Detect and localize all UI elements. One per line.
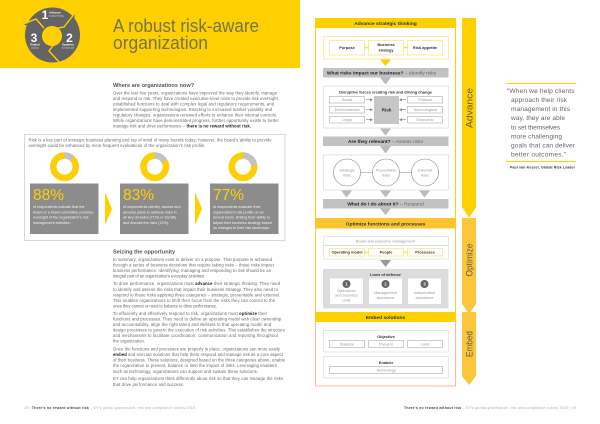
panel: risk categories: Preventable xyxy=(376,168,396,172)
text block: seizing the opportunity: through a series of business decisions that require taking risks – these risks impact xyxy=(113,263,275,268)
title xyxy=(113,15,259,53)
stat card: 88% xyxy=(30,184,98,234)
panel: disruptive forces: Risk xyxy=(382,108,392,112)
panel: optimize functions and processes xyxy=(315,218,456,312)
arrows: three grey down xyxy=(341,190,430,198)
text block: where are organizations now: established functions to deal with complex legal and regulatory requirements, and xyxy=(113,102,275,106)
panel: disruptive forces xyxy=(324,86,448,128)
panel: board and executive management: Operating model xyxy=(332,250,362,255)
card: third line xyxy=(408,278,441,304)
panel: board oversight statistics xyxy=(24,134,285,240)
strategy boxes: strategy xyxy=(378,48,394,52)
pull quote: goals that can deliver xyxy=(511,142,576,150)
panel: embed solutions xyxy=(315,312,456,386)
stat card: 77%: organization's risk profile on an xyxy=(213,210,264,214)
stat card: 88%: oversight of the organization's risk xyxy=(33,216,89,220)
stat card: 88%: of respondents indicate that the xyxy=(33,205,84,209)
icon: advance optimize embed cycle xyxy=(23,8,80,63)
heading: optimize functions and processes: Optimize functions and processes xyxy=(346,221,426,227)
panel: board and executive management: Processes xyxy=(415,250,435,255)
panel: disruptive forces: Political xyxy=(418,97,432,102)
panel: risk categories xyxy=(324,155,448,190)
stat card: 83%: 83% xyxy=(123,187,154,204)
stat card: 83%: and discuss the risks (12%). xyxy=(123,221,169,225)
stat card: 88%: 88% xyxy=(33,187,64,204)
panel: risk categories: risks xyxy=(421,172,429,178)
arrow: grey down xyxy=(380,128,391,136)
side arrow: embed xyxy=(462,312,476,385)
stat card: 83% xyxy=(120,184,188,234)
panel: disruptive forces: Technological xyxy=(413,107,437,112)
panel: objective xyxy=(324,330,448,352)
stat card: 83%: of respondents identify, assess and xyxy=(123,205,181,209)
bar: assess risks xyxy=(323,136,448,146)
panel: lines of defense: Lines of defense xyxy=(370,272,402,277)
bar: assess risks: Are they relevant? – Assess risks xyxy=(348,139,424,145)
text block: seizing the opportunity: of their business. These solutions, designed based on the three categories above, enable xyxy=(113,358,286,362)
pull quote: Paul van Kessel, Global Risk Leader xyxy=(510,166,576,170)
text block: seizing the opportunity: respond to those risks applying three categories – strategic, preventable and external. xyxy=(113,292,280,298)
arrow: grey down xyxy=(380,260,391,267)
panel: advance strategic thinking xyxy=(315,18,456,218)
bar: respond: What do I do about it? – Respond xyxy=(347,202,424,208)
text block: seizing the opportunity: design processes to govern the execution of risk activities. This establishes the structure xyxy=(113,328,286,333)
panel: board and executive management: Board and executive management xyxy=(356,238,416,244)
text block: seizing the opportunity: business performance. Identifying, managing and responding to risk should be an xyxy=(113,268,272,273)
icon: advance optimize embed cycle: Embed xyxy=(30,42,40,46)
panel: objective: Prevent xyxy=(379,342,394,346)
footer: left page: 18 | There's no reward without risk – EY's global governance, risk and compliance survey 2015 xyxy=(24,406,195,410)
heading: embed solutions: Embed solutions xyxy=(366,315,405,321)
text block: seizing the opportunity: that drive performance and success. xyxy=(113,382,184,387)
side arrow: advance: Advance xyxy=(464,88,476,128)
text block: seizing the opportunity: embed and execute solutions that help them respond and manage risk as a core aspect xyxy=(113,352,284,357)
pull quote: more challenging xyxy=(511,133,562,140)
arrow: grey down xyxy=(380,208,391,215)
bar: identify risks: What risks impact our business? – Identify risks xyxy=(327,71,437,77)
arrow: grey down xyxy=(380,78,391,84)
pull quote: “When we help clients xyxy=(507,88,575,95)
footer: right page: There's no reward without risk – EY's global governance, risk and compliance survey 2015 | 19 xyxy=(404,406,576,410)
panel: risk categories: risks xyxy=(382,172,390,178)
arrow: grey down xyxy=(380,146,391,154)
panel: enabler: Technology xyxy=(376,368,396,372)
text block: seizing the opportunity: To efficiently and effectively respond to risk, organizations must optimize their xyxy=(113,311,268,316)
title: A robust risk-aware xyxy=(113,15,259,36)
stat card: 77%: on changes to their risk landscape. xyxy=(213,226,270,230)
text block: where are organizations now: regulatory changes, organizations renewed efforts to enhance their internal controls. xyxy=(113,112,277,118)
side arrow: advance xyxy=(462,18,476,218)
pull quote: better outcomes.” xyxy=(511,152,566,158)
bar: respond xyxy=(323,199,448,208)
icon: advance optimize embed cycle: strategic thinking xyxy=(48,14,64,18)
heading: seizing the opportunity: Seizing the opportunity xyxy=(113,250,176,256)
heading: advance strategic thinking xyxy=(315,18,456,28)
panel: disruptive forces: Environmental xyxy=(335,107,360,112)
panel: disruptive forces: Economic xyxy=(416,117,434,122)
stat card: 77%: 77% xyxy=(213,187,244,204)
text block: seizing the opportunity: and mechanisms to facilitate coordination, communication and reporting throughout xyxy=(113,333,279,338)
card: first line xyxy=(330,278,363,304)
stat card: 88%: management activities. xyxy=(33,221,71,225)
panel: enabler xyxy=(324,356,448,378)
card: first line: units xyxy=(342,297,351,302)
text block: seizing the opportunity: the organization to prevent, balance or limit the impact of risks. Leveraging enablers xyxy=(113,363,277,368)
panel: enabler: Enabler xyxy=(379,360,394,365)
arrow: 83% to 77% xyxy=(195,192,202,225)
card: second line: Management xyxy=(374,290,398,295)
card: second line xyxy=(369,278,402,304)
pull quote: approach their risk xyxy=(511,97,568,104)
panel: board and executive management xyxy=(324,236,448,259)
stat card: 77%: annual basis, limiting their ability to xyxy=(213,216,270,220)
panel: disruptive forces: Social xyxy=(342,97,352,102)
text block: where are organizations now: manage risk and drive performance – there is no reward without risk. xyxy=(113,124,251,128)
panel: objective: Limit xyxy=(421,342,430,346)
text block: seizing the opportunity: In summary, organizations exist to deliver on a purpose. That purpose is achieved xyxy=(113,257,273,262)
text block: seizing the opportunity: and accountability, align the right talent and skillsets to that operating model and xyxy=(113,322,272,327)
heading: advance strategic thinking: Advance strategic thinking xyxy=(354,21,417,27)
pull quote: way, they are able xyxy=(510,115,565,122)
card: first line: 1 xyxy=(345,282,348,286)
card: first line: and business xyxy=(335,293,358,298)
panel: risk categories: Strategic xyxy=(339,168,355,172)
stat card: 77%: of respondents evaluate their xyxy=(213,205,261,209)
icon: advance optimize embed cycle: Advance xyxy=(49,10,61,14)
card: third line: Independent xyxy=(414,290,436,295)
strategy boxes: Purpose xyxy=(339,45,356,50)
icon: advance optimize embed cycle: 2 xyxy=(66,31,73,45)
icon: advance optimize embed cycle: solutions xyxy=(31,46,39,50)
stat card: 88%: board or a board committee provides xyxy=(33,210,93,214)
chart: donut 83% xyxy=(139,151,170,182)
chart: donut 77% xyxy=(231,154,255,179)
stat card: 83%: all key domains (71%) or identify xyxy=(123,216,176,220)
text block: seizing the opportunity: Once the functions and processes are properly in place, organizations can more easily xyxy=(113,346,281,352)
chart: donut 88% xyxy=(49,151,80,183)
text block: board oversight intro: Risk is a key part of strategic business planning and top of mind of many boards today; however, the board's ability to provide xyxy=(28,138,272,142)
pull quote: management in this xyxy=(511,106,571,113)
arrow: yellow down xyxy=(380,60,391,66)
text block: seizing the opportunity: the organization. xyxy=(113,339,145,344)
card: second line: 2 xyxy=(384,282,387,286)
strategy boxes: Business xyxy=(377,42,395,47)
panel: risk categories: risks xyxy=(343,172,351,178)
panel: board and executive management: People xyxy=(380,250,393,255)
heading: optimize functions and processes xyxy=(315,218,456,228)
card: third line: assurance xyxy=(416,295,433,300)
side arrow: embed: Embed xyxy=(464,331,476,357)
pull quote: to set themselves xyxy=(511,124,561,131)
icon: advance optimize embed cycle: Optimize xyxy=(62,42,74,46)
text block: where are organizations now: Over the last five years, organizations have improved the way they identify, manage xyxy=(113,90,278,96)
text block: seizing the opportunity: integral part of an organization's everyday activities. xyxy=(113,274,205,279)
bar: identify risks xyxy=(323,68,448,78)
text block: seizing the opportunity xyxy=(113,257,286,387)
heading: where are organizations now: Where are organizations now? xyxy=(113,83,195,89)
text block: seizing the opportunity: such as technology, organizations can support and sustain these solutions. xyxy=(113,369,258,374)
text block: where are organizations now: and respond to risk. They have created executive-level roles to provide risk oversight, xyxy=(113,96,279,101)
stat card: 83%: develop plans to address risks in xyxy=(123,210,176,214)
panel: objective: Balance xyxy=(340,342,354,346)
side arrow: optimize: Optimize xyxy=(464,244,476,276)
text block: where are organizations now: implemented supporting technologies. Reacting to increased market volatility and xyxy=(113,107,273,112)
icon: advance optimize embed cycle: 1 xyxy=(42,8,49,22)
text block: where are organizations now xyxy=(113,90,280,128)
panel: disruptive forces: Legal xyxy=(342,117,352,122)
side arrow: optimize xyxy=(462,218,476,314)
card: third line: 3 xyxy=(423,282,426,286)
header band xyxy=(0,0,300,68)
heading: embed solutions xyxy=(315,312,456,322)
pull quote xyxy=(506,83,576,170)
arrow: 88% to 83% xyxy=(105,192,112,225)
icon: advance optimize embed cycle: functions and xyxy=(62,46,74,50)
text block: seizing the opportunity: functions and processes. They need to define an operating model with clear ownership xyxy=(113,316,282,322)
card: second line: assurance xyxy=(377,295,394,300)
text block: seizing the opportunity: This enables organizations to shift their focus from the risks they can control to the xyxy=(113,298,276,303)
text block: board oversight intro: oversight could be enhanced by more frequent evaluations of the organization's risk profile. xyxy=(28,143,206,148)
strategy boxes: Risk appetite xyxy=(413,45,438,50)
panel: disruptive forces: Disruptive forces creating risk and driving change xyxy=(339,90,433,94)
text block: seizing the opportunity: ones they cannot or need to balance to drive performance. xyxy=(113,304,217,309)
text block: seizing the opportunity: To drive performance, organizations must advance their strategic thinking. They need xyxy=(113,281,281,286)
panel: risk categories: External xyxy=(418,168,432,172)
panel: lines of defense xyxy=(323,269,448,308)
text block: seizing the opportunity: EY can help organizations think differently about risk so that they can manage the risks xyxy=(113,376,283,381)
title: organization xyxy=(113,32,208,53)
panel: objective: Objective xyxy=(377,334,396,339)
icon: advance optimize embed cycle: 3 xyxy=(31,31,38,45)
stat card: 77%: adjust their business strategy based xyxy=(213,221,272,225)
text block: board oversight intro xyxy=(28,138,272,148)
text block: seizing the opportunity: to identify and assess the risks that impact their business strategy. They also need to xyxy=(113,287,279,292)
card: first line: Operations xyxy=(337,288,356,293)
text block: where are organizations now: While organizations have demonstrated progress, further opportunity exists to better xyxy=(113,118,280,123)
strategy boxes xyxy=(324,36,448,59)
stat card: 77% xyxy=(210,184,278,234)
